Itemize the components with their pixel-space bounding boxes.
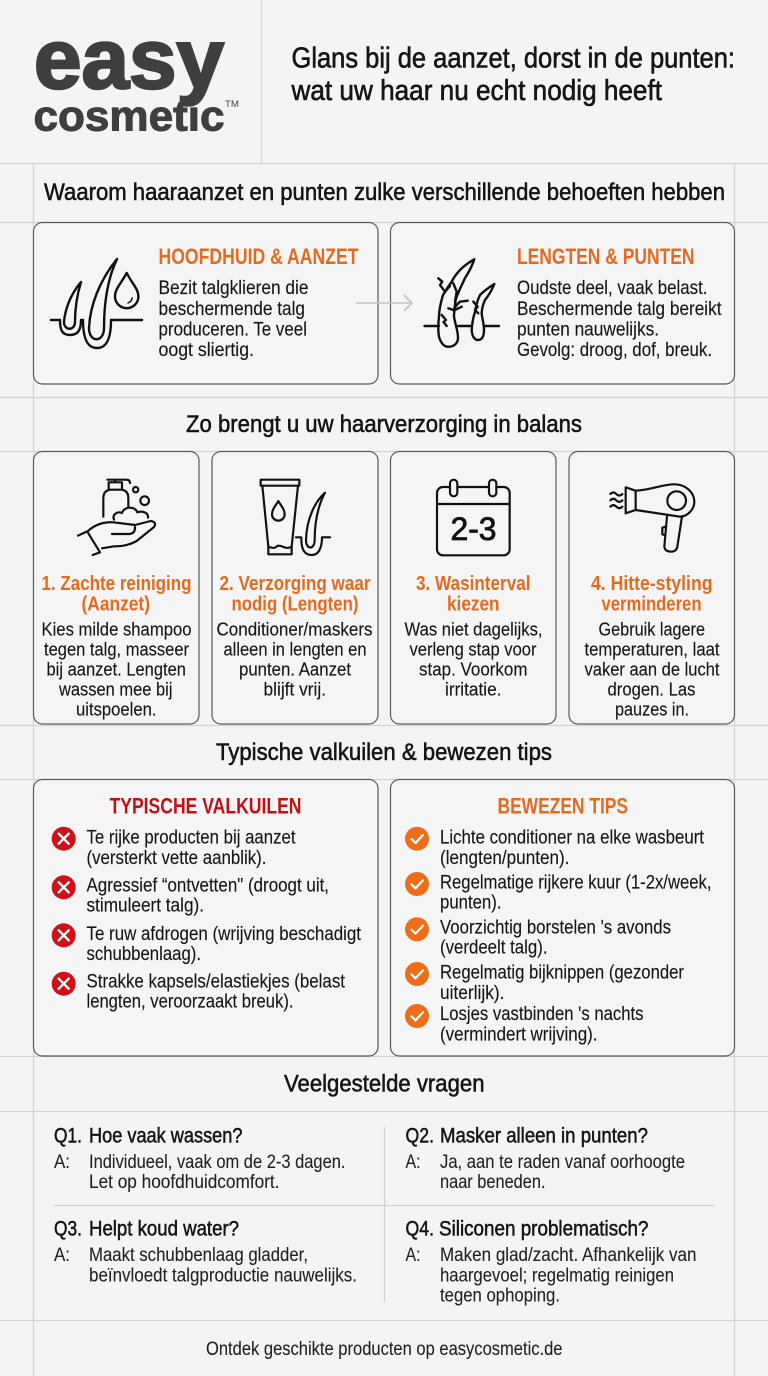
icon: check 5 <box>405 1004 429 1028</box>
text: stap 1: Kies milde shampoo <box>42 618 192 640</box>
text: tip 5: Losjes vastbinden 's nachts <box>440 1004 644 1025</box>
heading: stap 4: verminderen <box>602 594 702 616</box>
text: lengten: Gevolg: droog, dof, breuk. <box>517 339 712 361</box>
faq: vraag 3: beïnvloedt talgproductie nauwelijks. <box>89 1266 357 1286</box>
panel: bewezen tips <box>390 780 734 1056</box>
text: stap 1: bij aanzet. Lengten <box>46 658 186 680</box>
text: tip 5: (vermindert wrijving). <box>440 1024 598 1046</box>
faq: vraag 1: Q1. <box>54 1124 82 1148</box>
heading: lengten: LENGTEN & PUNTEN <box>517 244 694 269</box>
text: valkuil 1 <box>86 828 296 869</box>
faq: vraag 4: Maken glad/zacht. Afhankelijk van <box>440 1245 696 1266</box>
panel: stap 3 wasinterval <box>390 452 556 724</box>
logo: easy cosmetic: TM <box>225 99 239 110</box>
text: stap 4: Gebruik lagere <box>598 618 705 640</box>
text: valkuil 2: stimuleert talg). <box>86 896 204 916</box>
text: lengten: Oudste deel, vaak belast. <box>517 277 708 299</box>
faq: vraag 1: Individueel, vaak om de 2-3 dagen. <box>89 1152 346 1173</box>
heading: stap 3: 3. Wasinterval <box>416 573 530 595</box>
logo: easy cosmetic: easy <box>34 12 224 106</box>
text: tip 1 <box>440 828 705 869</box>
icon: calendar <box>437 480 510 555</box>
icon: follicle with oil drop <box>51 259 142 348</box>
faq: vraag 3 <box>54 1218 357 1286</box>
faq: vraag 1: Hoe vaak wassen? <box>89 1124 242 1148</box>
text: tip 2: punten). <box>440 892 502 914</box>
text: stap 3: stap. Voorkom <box>419 658 528 680</box>
icon: check 3 <box>405 917 429 941</box>
icon: cross 1 <box>52 827 76 851</box>
text: valkuil 3 <box>86 924 362 965</box>
faq: vraag 3: Maakt schubbenlaag gladder, <box>89 1245 308 1266</box>
text: hoofdhuid: produceren. Te veel <box>158 318 307 340</box>
heading: stap 1: (Aanzet) <box>82 594 150 616</box>
text: valkuil 2: Agressief “ontvetten" (droogt uit, <box>86 876 329 896</box>
icon: cross 3 <box>52 923 76 947</box>
logo: easy cosmetic: cosmetic <box>34 92 224 140</box>
footer: Ontdek geschikte producten op easycosmetic.de <box>206 1339 562 1360</box>
heading: hoofdhuid: HOOFDHUID & AANZET <box>158 244 359 269</box>
faq: vraag 4: haargevoel; regelmatig reinigen <box>440 1266 674 1286</box>
faq: vraag 2: naar beneden. <box>440 1172 546 1193</box>
text: stap 1: tegen talg, masseer <box>44 638 189 660</box>
heading: stap 1 <box>42 573 192 616</box>
icon: cross 4 <box>52 972 76 996</box>
heading: stap 4: 4. Hitte-styling <box>591 573 712 595</box>
text: hoofdhuid <box>158 277 308 361</box>
panel: stap 4 hitte-styling <box>569 452 734 724</box>
faq: vraag 3: A: <box>54 1245 70 1266</box>
text: tip 1: Lichte conditioner na elke wasbeurt <box>440 828 705 848</box>
text: tip 5 <box>440 1004 644 1046</box>
panel: lengten en punten <box>390 222 734 384</box>
text: stap 1: wassen mee bij <box>58 678 173 700</box>
faq: vraag 4: A: <box>406 1245 420 1266</box>
text: tip 2: Regelmatige rijkere kuur (1-2x/week, <box>440 872 712 894</box>
faq: vraag 4: tegen ophoping. <box>440 1286 560 1306</box>
panel: hoofdhuid en aanzet <box>34 222 378 384</box>
heading: stap 3: kiezen <box>447 594 500 616</box>
text: stap 1: uitspoelen. <box>76 698 156 720</box>
text: tip 3 <box>440 918 671 958</box>
text: valkuil 1: (versterkt vette aanblik). <box>86 848 266 869</box>
text: valkuil 3: Te ruw afdrogen (wrijving beschadigt <box>86 924 362 945</box>
logo: easy cosmetic <box>34 12 239 140</box>
faq: vraag 1: A: <box>54 1152 70 1173</box>
faq: vraag 4: Q4. <box>406 1218 434 1240</box>
heading: valkuilen en tips: Typische valkuilen & bewezen tips <box>216 739 552 766</box>
text: hoofdhuid: Bezit talgklieren die <box>158 277 308 299</box>
icon: shampoo and hand <box>78 480 155 555</box>
faq: vraag 2: Q2. <box>406 1124 434 1148</box>
title <box>291 42 735 107</box>
text: valkuil 4: lengten, veroorzaakt breuk). <box>86 992 294 1012</box>
icon: check 2 <box>405 872 429 896</box>
text: stap 2: blijft vrij. <box>264 678 326 700</box>
text: stap 4: vaker aan de lucht <box>584 658 720 680</box>
title: wat uw haar nu echt nodig heeft <box>291 75 662 107</box>
text: stap 4: temperaturen, laat <box>584 638 720 660</box>
faq: vraag 2 <box>406 1124 685 1193</box>
text: lengten: punten nauwelijks. <box>517 318 659 340</box>
text: hoofdhuid: beschermende talg <box>158 298 305 320</box>
heading: stap 1: 1. Zachte reiniging <box>42 573 192 595</box>
text: tip 4: uiterlijk). <box>440 983 504 1004</box>
heading: stap 2: nodig (Lengten) <box>232 594 358 616</box>
text: tip 1: (lengten/punten). <box>440 848 570 869</box>
text: tip 4: Regelmatig bijknippen (gezonder <box>440 962 685 984</box>
heading: stap 2: 2. Verzorging waar <box>220 573 371 595</box>
text: tip 2 <box>440 872 712 914</box>
panel: stap 1 zachte reiniging <box>34 452 199 724</box>
heading: balans: Zo brengt u uw haarverzorging in balans <box>186 411 582 438</box>
heading: stap 2 <box>220 573 371 616</box>
icon: check 4 <box>405 962 429 986</box>
text: stap 3: verleng stap voor <box>410 638 536 660</box>
heading: tips: BEWEZEN TIPS <box>498 794 628 818</box>
text: hoofdhuid: oogt sliertig. <box>158 339 254 361</box>
text: valkuil 3: schubbenlaag). <box>86 944 201 965</box>
text: valkuil 4: Strakke kapsels/elastiekjes (belast <box>86 972 346 992</box>
text: stap 3: Was niet dagelijks, <box>404 618 542 640</box>
panel: typische valkuilen <box>34 780 378 1056</box>
arrow <box>356 295 412 311</box>
faq: vraag 2: A: <box>406 1152 420 1173</box>
text: stap 3: irritatie. <box>445 678 502 700</box>
text: stap 2 <box>216 618 372 700</box>
icon: calendar: 2-3 <box>450 511 496 547</box>
text: valkuil 1: Te rijke producten bij aanzet <box>86 828 296 848</box>
icon: tube and hair <box>261 480 330 555</box>
text: valkuil 2 <box>86 876 329 916</box>
text: stap 4: pauzes in. <box>615 698 689 720</box>
text: lengten <box>517 277 722 361</box>
text: stap 4: drogen. Las <box>608 678 696 700</box>
icon: damaged hair <box>424 259 499 347</box>
faq: vraag 4 <box>406 1218 696 1306</box>
text: tip 3: Voorzichtig borstelen 's avonds <box>440 918 671 938</box>
text: tip 4 <box>440 962 685 1004</box>
text: tip 3: (verdeelt talg). <box>440 938 548 958</box>
faq: vraag 1: Let op hoofdhuidcomfort. <box>89 1172 280 1193</box>
icon: hair dryer <box>610 484 694 552</box>
icon: check 1 <box>405 827 429 851</box>
text: lengten: Beschermende talg bereikt <box>517 298 722 320</box>
faq: vraag 2: Ja, aan te raden vanaf oorhoogte <box>440 1152 685 1173</box>
faq: vraag 2: Masker alleen in punten? <box>440 1124 648 1148</box>
text: stap 4 <box>584 618 720 720</box>
heading: veelgestelde vragen: Veelgestelde vragen <box>284 1070 484 1098</box>
heading: stap 4 <box>591 573 712 616</box>
panel: stap 2 verzorging <box>212 452 378 724</box>
heading: stap 3 <box>416 573 530 616</box>
text: stap 3 <box>404 618 542 700</box>
text: stap 2: punten. Aanzet <box>239 658 351 680</box>
faq: vraag 3: Q3. <box>54 1218 82 1240</box>
faq: vraag 3: Helpt koud water? <box>89 1218 239 1240</box>
heading: valkuilen: TYPISCHE VALKUILEN <box>110 794 302 818</box>
text: stap 2: alleen in lengten en <box>224 638 366 660</box>
icon: cross 2 <box>52 875 76 899</box>
faq: vraag 1 <box>54 1124 346 1193</box>
faq: vraag 4: Siliconen problematisch? <box>439 1218 648 1240</box>
text: valkuil 4 <box>86 972 346 1012</box>
text: stap 2: Conditioner/maskers <box>216 618 372 640</box>
text: stap 1 <box>42 618 192 720</box>
